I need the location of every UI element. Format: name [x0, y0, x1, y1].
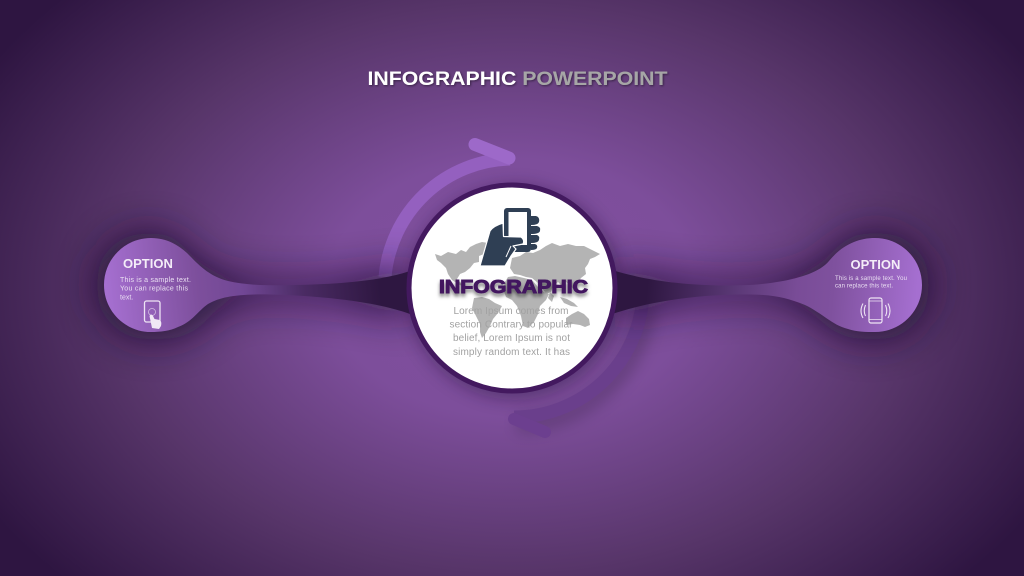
arrow: bottom clockwise — [514, 296, 647, 432]
center text block: belief, Lorem Ipsum is not — [453, 333, 570, 344]
left text block: text. — [120, 294, 133, 302]
left text block: You can replace this — [120, 286, 188, 292]
panel: right option — [612, 238, 922, 332]
right text block: This is a sample text. You — [835, 276, 907, 282]
right connector shadow — [615, 232, 930, 340]
left connector shadow — [96, 232, 410, 340]
heading: infographic: INFOGRAPHIC — [439, 276, 588, 297]
icon: tablet touch — [144, 301, 161, 329]
center text block: Lorem Ipsum comes from — [454, 306, 568, 317]
left text block: This is a sample text. — [120, 277, 191, 284]
left teardrop shape — [104, 238, 410, 332]
icon: phone signal — [861, 298, 890, 323]
title: INFOGRAPHIC POWERPOINT — [368, 68, 668, 90]
center text block: section Contrary to popular — [450, 320, 573, 330]
right teardrop shape — [612, 238, 922, 332]
arrow: top clockwise — [385, 144, 510, 277]
panel: center circle — [409, 185, 615, 391]
icon: hand holding phone — [480, 208, 540, 266]
right text block: can replace this text. — [835, 284, 893, 290]
right heading: OPTION — [850, 257, 900, 272]
world map — [435, 242, 600, 338]
left heading: OPTION — [123, 256, 173, 271]
center text block: simply random text. It has — [453, 347, 570, 358]
panel: left option — [104, 238, 410, 332]
center circle shadow — [407, 184, 623, 400]
